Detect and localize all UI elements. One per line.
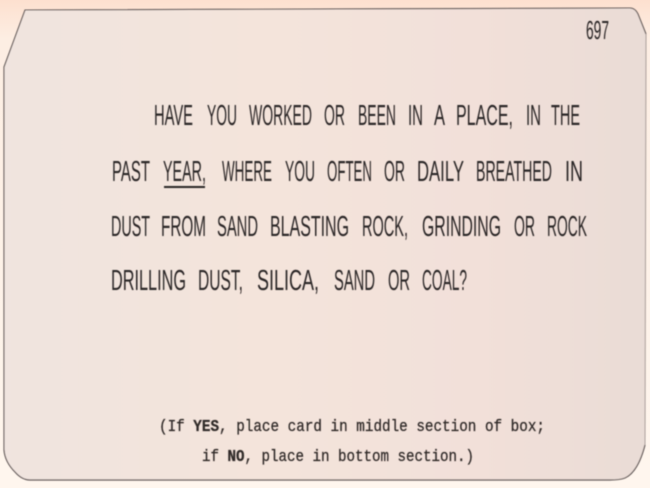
line 1: OR bbox=[324, 100, 345, 132]
sorting instructions bbox=[159, 417, 545, 466]
line 2: YEAR, bbox=[163, 156, 206, 188]
line 4: DUST, bbox=[198, 265, 243, 297]
question text bbox=[111, 100, 587, 297]
question text: COAL? bbox=[422, 265, 467, 297]
line 3: BLASTING bbox=[270, 211, 349, 243]
line 3: GRINDING bbox=[422, 211, 501, 243]
line 2: BREATHED bbox=[476, 156, 552, 188]
line 2: DAILY bbox=[417, 156, 464, 188]
line 1: PLACE, bbox=[456, 100, 513, 132]
line 2: IN bbox=[565, 156, 583, 188]
line 2: OR bbox=[384, 156, 405, 188]
line 4: SAND bbox=[334, 265, 375, 297]
text: ROCK bbox=[547, 211, 587, 243]
line 3 bbox=[111, 211, 587, 243]
underline: year bbox=[164, 186, 205, 188]
line 2: OFTEN bbox=[327, 156, 372, 188]
line 1: IN bbox=[526, 100, 541, 132]
line 1: WORKED bbox=[249, 100, 312, 132]
line 3: SAND bbox=[217, 211, 258, 243]
line 3: ROCK, bbox=[362, 211, 408, 243]
card number: 697 bbox=[586, 15, 609, 45]
line 4: OR bbox=[388, 265, 410, 297]
instruction line 2: if NO, place in bottom section.) bbox=[202, 447, 474, 466]
line 1: BEEN bbox=[358, 100, 396, 132]
line 4: DRILLING bbox=[111, 265, 186, 297]
line 3: OR bbox=[514, 211, 535, 243]
line 1: IN bbox=[408, 100, 423, 132]
line 2 bbox=[112, 156, 583, 188]
line 4: SILICA, bbox=[257, 265, 319, 297]
line 2: WHERE bbox=[222, 156, 272, 188]
line 1: THE bbox=[551, 100, 580, 132]
line 3: DUST bbox=[111, 211, 150, 243]
line 1: YOU bbox=[207, 100, 237, 132]
line 1: A bbox=[434, 100, 445, 132]
line 1: HAVE bbox=[154, 100, 193, 132]
line 1 bbox=[154, 100, 580, 132]
instruction line 1: (If YES, place card in middle section of box; bbox=[159, 417, 545, 436]
line 2: PAST bbox=[112, 156, 150, 188]
line 4 bbox=[111, 265, 467, 297]
line 2: YOU bbox=[285, 156, 315, 188]
line 3: FROM bbox=[161, 211, 206, 243]
